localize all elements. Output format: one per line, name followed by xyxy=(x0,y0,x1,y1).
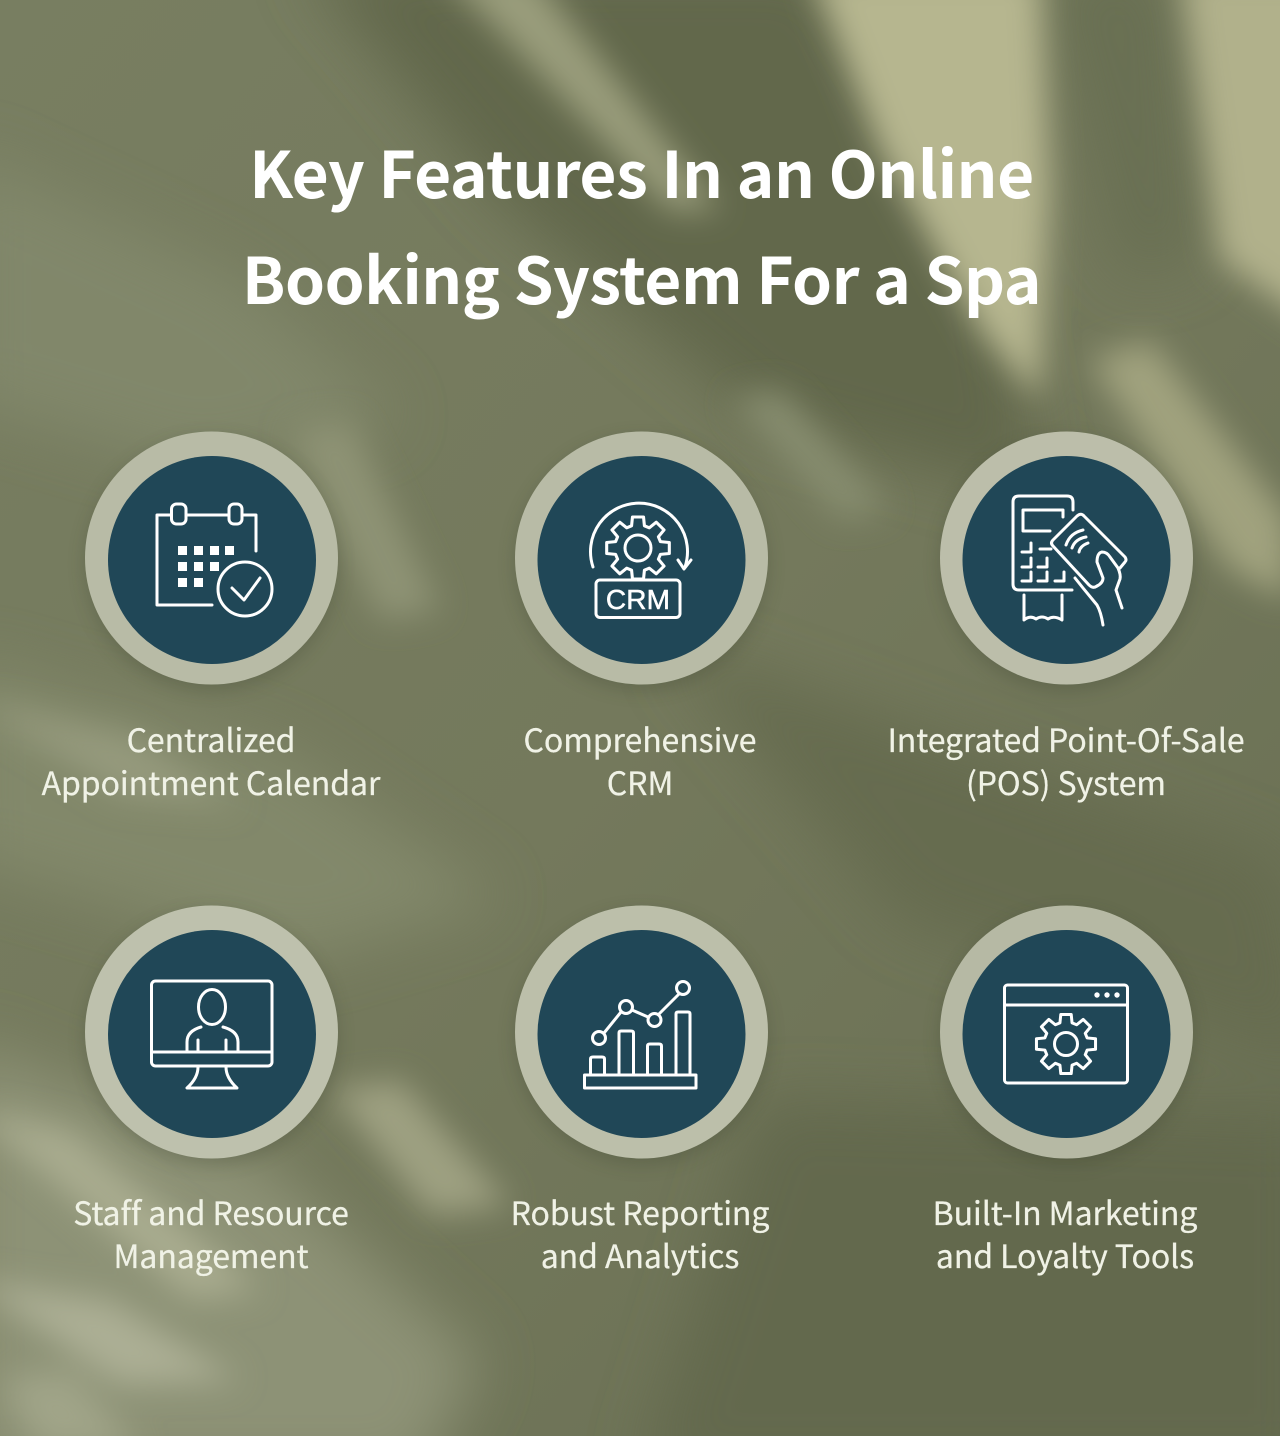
label: robust reporting: Robust Reporting xyxy=(511,1189,769,1235)
label: staff and resource management: Management xyxy=(113,1232,309,1278)
label: robust reporting xyxy=(511,1189,770,1278)
icon badge: POS card terminal xyxy=(940,432,1193,690)
CRM wordmark: CRM xyxy=(606,584,670,615)
label: centralized appointment calendar: Appointment Calendar xyxy=(42,759,380,805)
label: comprehensive CRM: Comprehensive xyxy=(524,716,756,762)
title: Booking System For a Spa xyxy=(242,231,1041,323)
label: marketing and loyalty: and Loyalty Tools xyxy=(936,1232,1194,1278)
label: centralized appointment calendar: Centralized xyxy=(127,716,295,762)
title: Key Features In an Online xyxy=(249,125,1034,217)
label: comprehensive CRM: CRM xyxy=(607,759,673,805)
icon badge: CRM gear xyxy=(515,432,768,690)
title xyxy=(242,125,1041,323)
label: comprehensive CRM xyxy=(524,716,756,805)
label: staff and resource management: Staff and Resource xyxy=(73,1189,349,1235)
icon badge: reporting bar chart xyxy=(515,906,768,1164)
label: centralized appointment calendar xyxy=(42,716,381,805)
label: marketing and loyalty: Built-In Marketing xyxy=(933,1189,1197,1235)
icon badge: marketing window gear xyxy=(940,906,1193,1164)
label: staff and resource management xyxy=(73,1189,349,1278)
icon badge: staff monitor xyxy=(85,906,338,1164)
label: integrated POS: Integrated Point-Of-Sale xyxy=(887,716,1245,762)
label: integrated POS: (POS) System xyxy=(966,759,1166,805)
label: robust reporting: and Analytics xyxy=(541,1232,739,1278)
label: integrated POS xyxy=(887,716,1245,805)
icon badge: appointment calendar xyxy=(85,432,338,690)
label: marketing and loyalty xyxy=(933,1189,1198,1278)
